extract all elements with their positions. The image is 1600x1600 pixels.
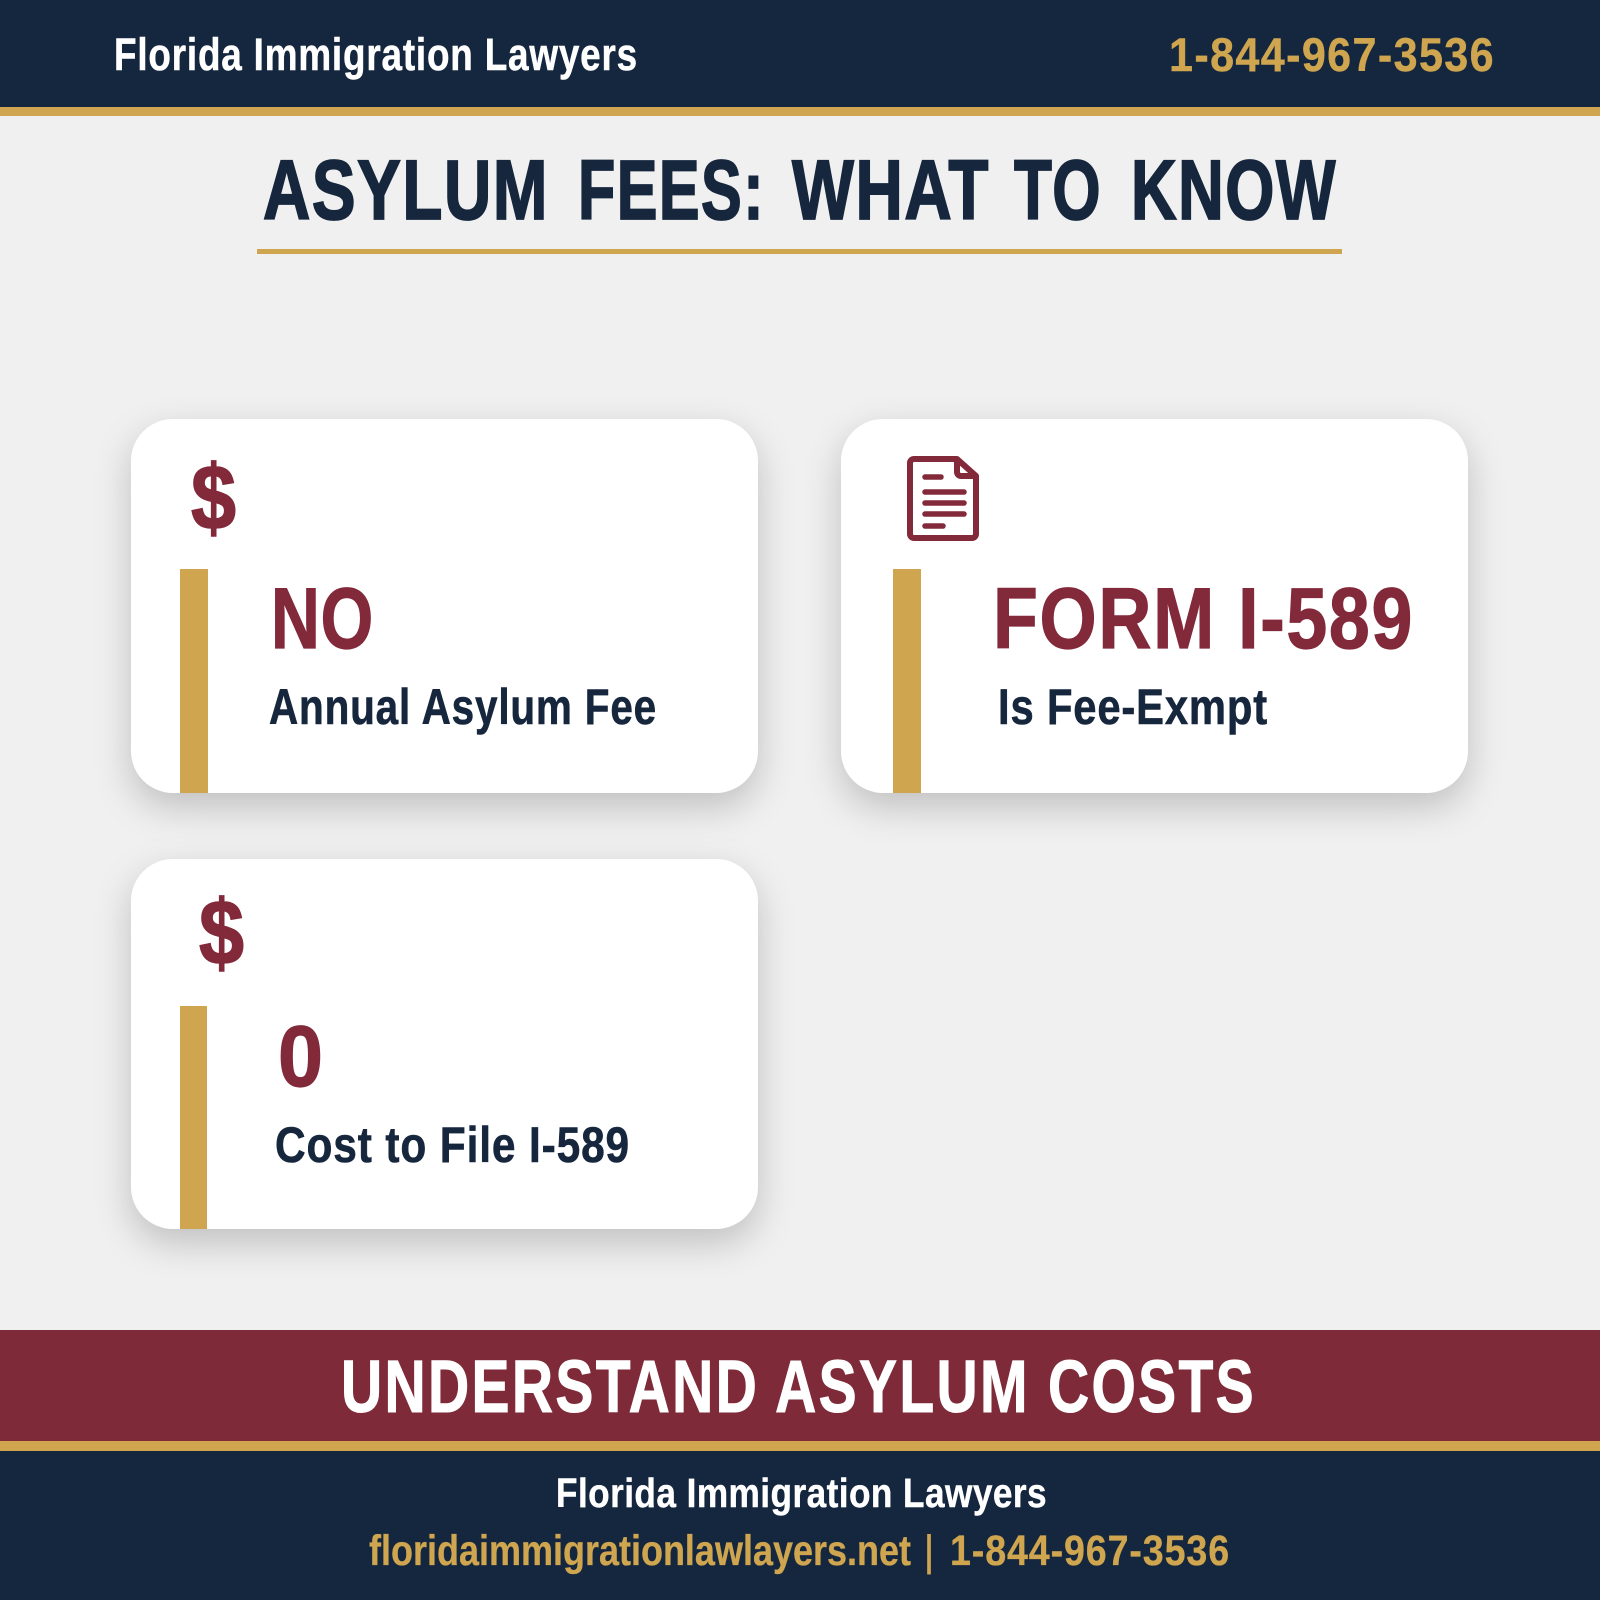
footer firm name: Florida Immigration Lawyers [556, 1470, 1047, 1516]
icon: dollar sign: $ [191, 447, 236, 549]
stat: form I-589: FORM I-589 [993, 571, 1414, 667]
stat: zero: 0 [278, 1009, 323, 1105]
panel: annual asylum fee [131, 419, 758, 793]
panel: form I-589 [841, 419, 1468, 793]
footer website and phone: | [925, 1527, 933, 1575]
footer [0, 1441, 1600, 1600]
call-to-action banner [0, 1330, 1600, 1441]
title: TO [1014, 143, 1102, 237]
title: ASYLUM [263, 143, 549, 237]
call-to-action banner: UNDERSTAND ASYLUM COSTS [341, 1345, 1256, 1428]
title: WHAT [792, 143, 990, 237]
header phone number: 1-844-967-3536 [1169, 28, 1495, 81]
label: annual asylum fee: Annual Asylum Fee [269, 679, 657, 735]
title [257, 143, 1342, 254]
header firm name: Florida Immigration Lawyers [114, 29, 638, 80]
title: FEES: [578, 143, 765, 237]
icon: dollar sign: $ [199, 882, 244, 984]
header bar [0, 0, 1600, 116]
title: KNOW [1131, 143, 1337, 237]
stat: NO: NO [271, 571, 374, 667]
label: cost to file I-589: Cost to File I-589 [275, 1117, 630, 1173]
icon: document [910, 459, 976, 538]
footer website and phone: floridaimmigrationlawlayers.net [369, 1527, 911, 1575]
panel: cost to file [131, 859, 758, 1229]
footer website and phone: 1-844-967-3536 [950, 1527, 1230, 1575]
label: is fee-exempt: Is Fee-Exmpt [998, 679, 1268, 735]
